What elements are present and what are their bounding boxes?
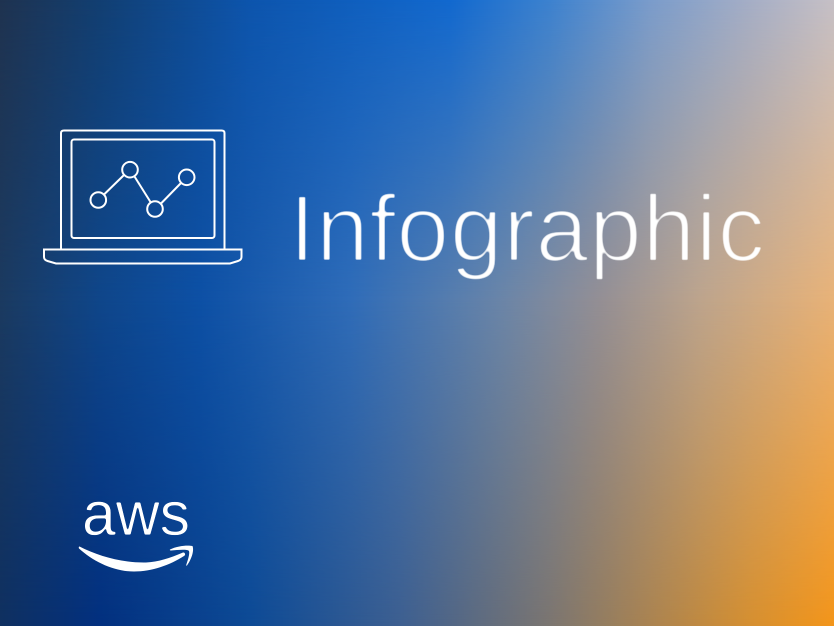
chart line bbox=[104, 175, 181, 204]
laptop base bbox=[44, 250, 242, 264]
laptop body bbox=[61, 130, 224, 249]
title: Infographic bbox=[289, 176, 765, 282]
laptop screen bbox=[72, 140, 214, 238]
icon: laptop with line chart bbox=[44, 130, 242, 264]
chart points bbox=[90, 162, 194, 217]
aws logo bbox=[79, 480, 193, 572]
smile arrow bbox=[79, 546, 193, 572]
aws wordmark: aws bbox=[82, 480, 190, 549]
